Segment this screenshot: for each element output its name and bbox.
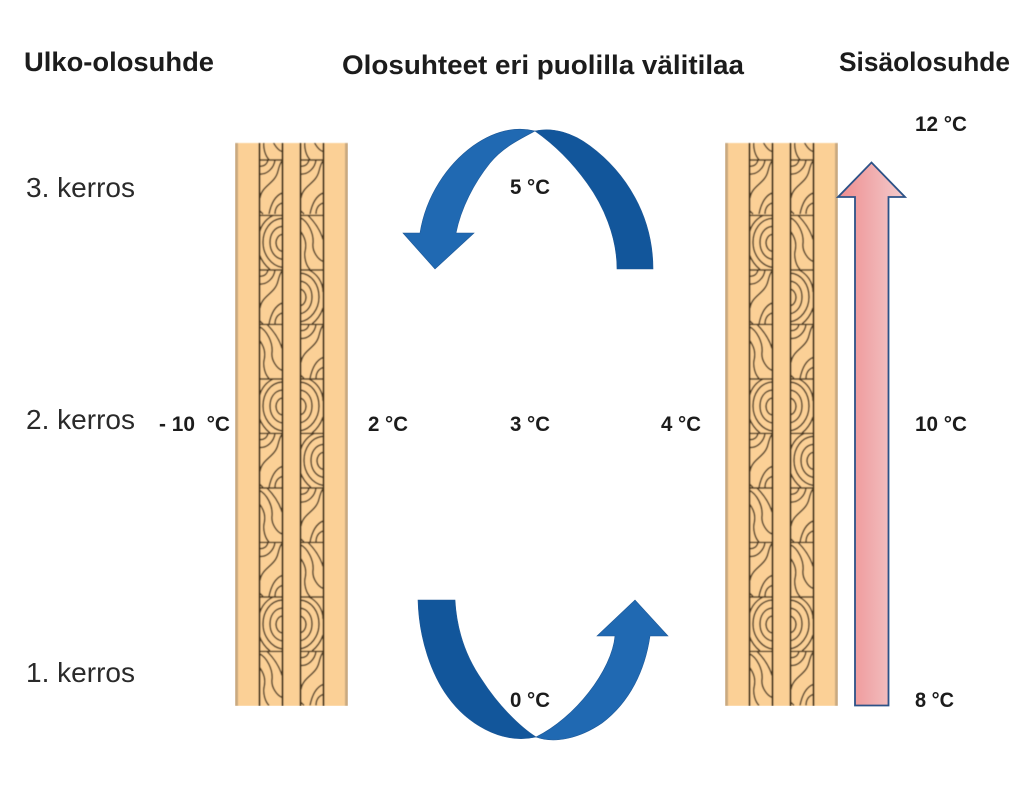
temperature: cavity bottom 0: 0 °C bbox=[510, 689, 550, 712]
left wooden wall bbox=[235, 106, 348, 706]
temperature: left of cavity 2: 2 °C bbox=[368, 413, 408, 436]
arrow: indoor temperature gradient rising bbox=[838, 162, 905, 706]
temperature: cavity middle 3: 3 °C bbox=[510, 413, 550, 436]
temperature: indoor middle 10: 10 °C bbox=[915, 413, 967, 436]
floor label: 2nd floor: 2. kerros bbox=[26, 404, 135, 435]
heading: conditions on both sides of the cavity: Olosuhteet eri puolilla välitilaa bbox=[342, 50, 745, 80]
floor label: 3rd floor: 3. kerros bbox=[26, 172, 135, 203]
temperature: indoor top 12: 12 °C bbox=[915, 113, 967, 136]
temperature: cavity top 5: 5 °C bbox=[510, 176, 550, 199]
heading: outdoor conditions: Ulko-olosuhde bbox=[24, 47, 214, 77]
temperature: outside -10: - 10 °C bbox=[159, 413, 230, 436]
floor label: 1st floor: 1. kerros bbox=[26, 657, 135, 688]
temperature: indoor bottom 8: 8 °C bbox=[915, 689, 954, 712]
temperature: right of cavity 4: 4 °C bbox=[661, 413, 701, 436]
arrow: air turning right at the bottom of the cavity bbox=[418, 600, 668, 740]
arrow: warm air rising and turning left at the top of the cavity bbox=[403, 129, 653, 269]
right wooden wall bbox=[725, 106, 838, 706]
heading: indoor conditions: Sisäolosuhde bbox=[839, 47, 1010, 77]
